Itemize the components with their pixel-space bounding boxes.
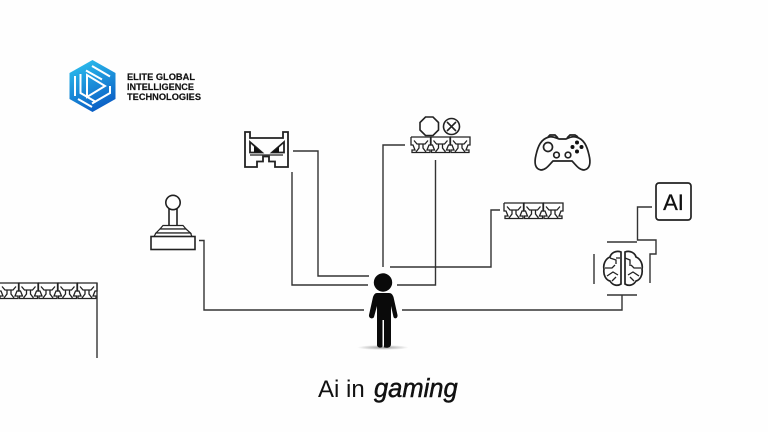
connector lines (199, 145, 656, 310)
logo wordmark: ELITE GLOBAL (127, 72, 196, 82)
logo wordmark: INTELLIGENCE (127, 82, 194, 92)
icon: pixel row top (411, 137, 470, 152)
title: Ai in (318, 376, 365, 403)
icon: AI box: AI (663, 190, 684, 215)
logo wordmark: TECHNOLOGIES (127, 92, 201, 102)
icon: joystick (151, 195, 195, 250)
icon: AI box (656, 183, 691, 220)
title: gaming (374, 375, 458, 403)
logo icon: hexagon (70, 60, 116, 112)
icon: monster (245, 132, 288, 167)
icon: pixel row right (504, 203, 563, 218)
person figure (357, 273, 409, 350)
logo (70, 60, 201, 112)
icon: pixel row left with post (0, 283, 97, 358)
icon: game controller (535, 135, 590, 170)
icon: octagon and crossed circle tokens (420, 117, 460, 136)
icon: brain with frame (594, 242, 642, 295)
